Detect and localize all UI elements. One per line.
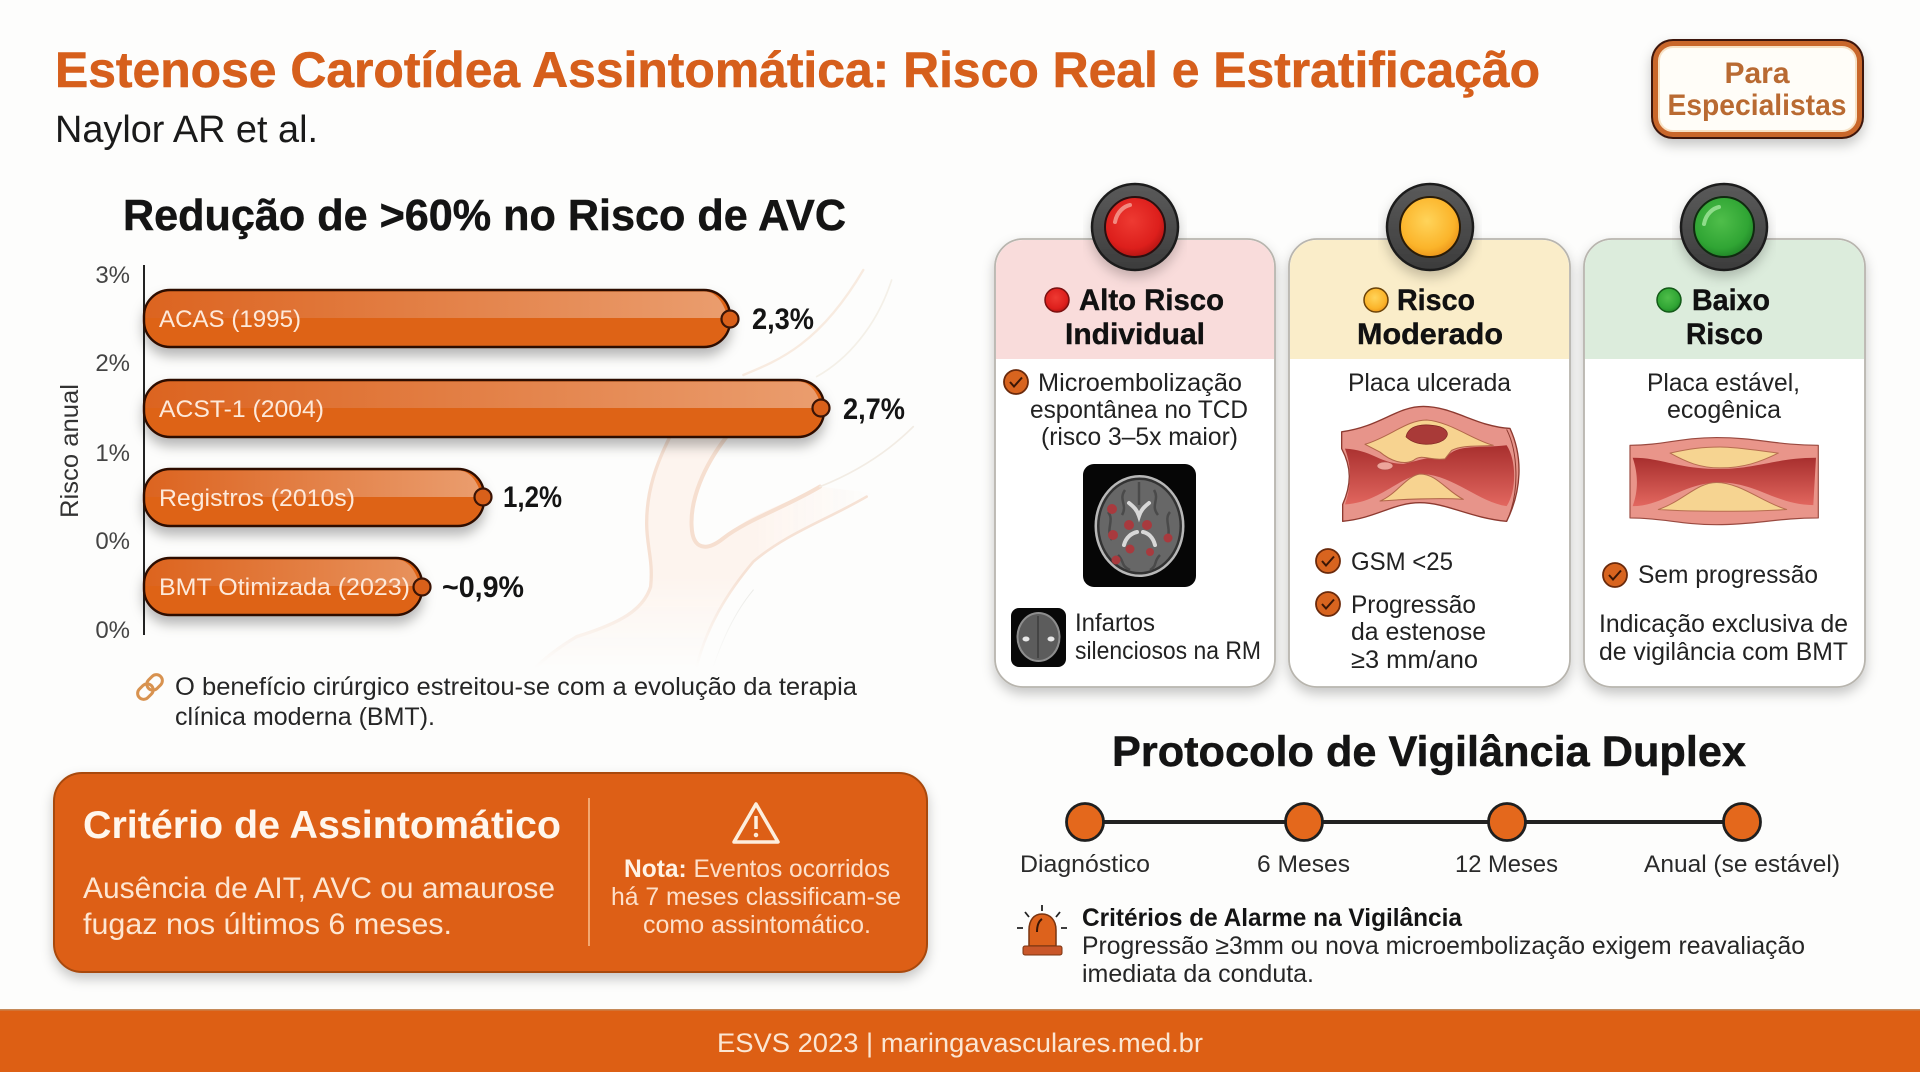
criterion: silent infarcts <box>1075 609 1261 665</box>
y axis title: Risco anual <box>56 384 84 518</box>
bar: Registros 2010s: 1,2% <box>503 481 562 514</box>
y axis ticks: 3% <box>95 262 130 289</box>
step: 6 meses <box>1257 804 1350 878</box>
y axis ticks: 0% <box>95 617 130 644</box>
footer: ESVS 2023 | maringavasculares.med.br <box>717 1028 1203 1058</box>
icon: chain link <box>135 672 165 702</box>
panel: criterio de assintomatico <box>54 773 927 972</box>
illustration: stable artery <box>1630 438 1818 525</box>
background illustration: carotid bifurcation <box>537 270 913 667</box>
y axis ticks: 0% <box>95 528 130 555</box>
chart note <box>135 672 857 731</box>
alarm criteria text: Critérios de Alarme na Vigilância <box>1082 904 1463 932</box>
footer <box>0 1009 1920 1072</box>
step: diagnostico <box>1020 804 1150 878</box>
bar: ACAS 1995: 2,3% <box>752 303 814 336</box>
criterion: microembolization <box>1004 369 1248 451</box>
criterion: microembolization: (risco 3–5x maior) <box>1041 423 1238 451</box>
alarm criteria text: Progressão ≥3mm ou nova microembolização exigem reavaliação <box>1082 932 1805 960</box>
bar: ACAS 1995: ACAS (1995) <box>159 306 301 333</box>
definition: fugaz nos últimos 6 meses. <box>83 908 452 941</box>
alarm criteria text <box>1082 904 1805 988</box>
heading <box>1357 284 1503 351</box>
definition: Ausência de AIT, AVC ou amaurose <box>83 872 555 905</box>
subtitle: authors: Naylor AR et al. <box>55 109 318 151</box>
heading: Alto Risco <box>1079 284 1224 317</box>
y axis ticks: 1% <box>95 440 130 467</box>
label: ulcerated plaque: Placa ulcerada <box>1348 369 1511 397</box>
criterion: stenosis progression <box>1316 591 1486 674</box>
step: diagnostico: Diagnóstico <box>1020 851 1150 878</box>
definition <box>83 872 555 941</box>
heading <box>1657 284 1770 351</box>
bar: ACST-1 2004 <box>144 380 905 437</box>
illustration: ulcerated artery <box>1342 406 1519 521</box>
indication text: Indicação exclusiva de <box>1599 610 1848 638</box>
step: anual: Anual (se estável) <box>1644 851 1840 878</box>
bar: ACST-1 2004: ACST-1 (2004) <box>159 396 324 423</box>
heading: Moderado <box>1357 318 1503 351</box>
heading: Critério de Assintomático <box>83 804 561 847</box>
icon: red light <box>1092 184 1178 270</box>
step: 12 meses <box>1455 804 1558 878</box>
image: small MRI thumbnail <box>1011 608 1066 667</box>
criterion: microembolization: Microembolização <box>1038 369 1242 397</box>
bar: ACST-1 2004: 2,7% <box>843 393 905 426</box>
criterion: stenosis progression: ≥3 mm/ano <box>1351 646 1478 674</box>
criterion: no progression: Sem progressão <box>1638 561 1818 589</box>
icon: warning triangle <box>734 804 778 842</box>
icon: amber light <box>1387 184 1473 270</box>
indication text <box>1599 610 1848 666</box>
label: stable plaque: ecogênica <box>1667 396 1781 424</box>
heading: Risco <box>1397 284 1475 317</box>
panel: risco moderado <box>1289 184 1570 687</box>
bar: BMT Otimizada 2023 <box>144 558 524 615</box>
label: stable plaque <box>1647 369 1800 424</box>
indication text: de vigilância com BMT <box>1599 638 1848 666</box>
heading <box>1045 284 1224 351</box>
note: como assintomático. <box>643 911 871 939</box>
chart heading: Redução de >60% no Risco de AVC <box>123 191 846 240</box>
note: Nota: Eventos ocorridos <box>624 855 890 883</box>
panel: baixo risco <box>1584 184 1865 687</box>
image: brain MRI with lesions <box>1083 464 1196 587</box>
criterion: silent infarcts: silenciosos na RM <box>1075 637 1261 665</box>
bar: Registros 2010s: Registros (2010s) <box>159 485 355 512</box>
y axis ticks <box>95 262 130 644</box>
icon: alarm siren <box>1017 905 1067 955</box>
bar: BMT Otimizada 2023: BMT Otimizada (2023) <box>159 574 410 601</box>
heading: Risco <box>1686 318 1763 351</box>
panel: alto risco <box>995 184 1275 687</box>
icon: green light <box>1681 184 1767 270</box>
note <box>611 855 901 939</box>
criterion: microembolization: espontânea no TCD <box>1030 396 1248 424</box>
alarm criteria text: imediata da conduta. <box>1082 960 1314 988</box>
step: anual <box>1644 804 1840 878</box>
badge: para especialistas <box>1651 39 1864 139</box>
badge: para especialistas: Para <box>1724 57 1790 90</box>
step: 12 meses: 12 Meses <box>1455 851 1558 878</box>
timeline: duplex surveillance <box>1020 804 1840 878</box>
criterion: GSM: GSM <25 <box>1351 548 1453 576</box>
y axis ticks: 2% <box>95 350 130 377</box>
chart note: clínica moderna (BMT). <box>175 703 435 731</box>
heading: Baixo <box>1692 284 1770 317</box>
title: Estenose Carotídea Assintomática: Risco Real e Estratificação <box>55 42 1540 98</box>
heading: Individual <box>1065 318 1205 351</box>
heading: protocolo: Protocolo de Vigilância Duplex <box>1112 728 1746 776</box>
bar chart: annual risk <box>56 262 905 644</box>
criterion: stenosis progression: Progressão <box>1351 591 1476 619</box>
chart note: O benefício cirúrgico estreitou-se com a evolução da terapia <box>175 673 857 701</box>
criterion: stenosis progression: da estenose <box>1351 618 1486 646</box>
step: 6 meses: 6 Meses <box>1257 851 1350 878</box>
badge: para especialistas: Especialistas <box>1668 89 1846 122</box>
bar: ACAS 1995 <box>144 290 814 347</box>
criterion: silent infarcts: Infartos <box>1075 609 1155 637</box>
label: stable plaque: Placa estável, <box>1647 369 1800 397</box>
bar: BMT Otimizada 2023: ~0,9% <box>442 571 524 604</box>
bar: Registros 2010s <box>144 469 562 526</box>
note: há 7 meses classificam-se <box>611 883 901 911</box>
